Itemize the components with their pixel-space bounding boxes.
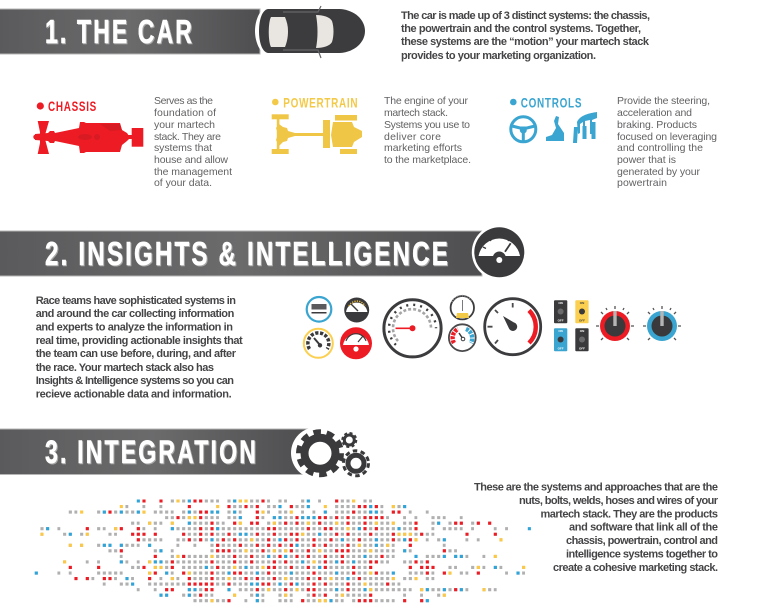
insights paragraph: the race. Your martech stack also has xyxy=(36,362,214,374)
intro paragraph: The car is made up of 3 distinct systems: the chassis, xyxy=(401,10,650,22)
insights paragraph: Race teams have sophisticated systems in xyxy=(36,295,236,307)
icon: dark toggle switch: ON xyxy=(558,301,563,305)
icon: yellow toggle switch: ON xyxy=(580,301,584,305)
icon: small yellow fuel gauge xyxy=(451,296,474,319)
banner: insights and intelligence: 2. INSIGHTS & INTELLIGENCE xyxy=(45,235,450,272)
chassis text: your martech xyxy=(154,119,215,131)
integration dot field xyxy=(35,501,531,601)
chassis text: house and allow xyxy=(154,154,228,166)
powertrain text: marketing efforts xyxy=(384,142,462,154)
icon: red dial gauge xyxy=(340,327,372,359)
icon: large speedometer xyxy=(384,300,441,357)
integration paragraph: create a cohesive marketing stack. xyxy=(553,562,718,574)
icon: second dark toggle switch xyxy=(575,328,589,351)
banner: the car: 1. THE CAR xyxy=(45,13,194,50)
integration paragraph: intelligence systems together to xyxy=(566,548,718,560)
insights paragraph xyxy=(36,295,243,400)
integration paragraph: and software that link all of the xyxy=(569,522,718,534)
powertrain text: martech stack. xyxy=(384,107,448,119)
controls label xyxy=(510,94,582,110)
icon: blue digital gauge xyxy=(307,297,331,322)
controls text: Provide the steering, xyxy=(617,95,710,107)
chassis text xyxy=(154,95,232,189)
chassis text: of your data. xyxy=(154,177,212,189)
icon: pedals xyxy=(573,112,597,143)
icon: red and blue temperature gauge xyxy=(449,324,476,351)
icon: gears xyxy=(291,427,368,479)
controls text: and controlling the xyxy=(617,142,703,154)
powertrain label: POWERTRAIN xyxy=(283,94,358,110)
chassis text: systems that xyxy=(154,142,212,154)
icon: dark toggle switch: OFF xyxy=(558,318,564,322)
icon: car from above xyxy=(255,6,365,58)
insights paragraph: and around the car collecting information xyxy=(36,308,235,320)
intro paragraph: provides to your marketing organization. xyxy=(401,50,596,62)
controls text: power that is xyxy=(617,154,676,166)
chassis label: CHASSIS xyxy=(48,98,97,114)
banner: integration xyxy=(0,429,308,474)
icon: large red zone gauge xyxy=(485,299,541,355)
icon: yellow tachometer xyxy=(304,329,333,358)
section 2: insights and intelligence xyxy=(0,225,681,400)
integration paragraph xyxy=(474,482,719,574)
icon: dark dial gauge xyxy=(344,298,369,322)
icon: blue toggle switch: OFF xyxy=(558,346,564,350)
integration paragraph: nuts, bolts, welds, hoses and wires of your xyxy=(519,495,719,507)
chassis text: Serves as the xyxy=(154,95,213,107)
icon: second dark toggle switch: OFF xyxy=(579,346,585,350)
controls text: focused on leveraging xyxy=(617,131,717,143)
section 1: the car xyxy=(0,6,717,189)
insights paragraph: Insights & Intelligence systems so you can xyxy=(36,375,234,387)
icon: second dark toggle switch: ON xyxy=(580,329,584,333)
controls label: CONTROLS xyxy=(521,94,582,110)
banner: insights and intelligence xyxy=(0,231,482,276)
controls text: braking. Products xyxy=(617,119,697,131)
insights paragraph: the team can use before, during, and after xyxy=(36,348,237,360)
controls text xyxy=(617,95,717,189)
powertrain text: deliver core xyxy=(384,131,441,143)
controls text: powertrain xyxy=(617,177,667,189)
intro paragraph: these systems are the “motion” your martech stack xyxy=(401,36,650,48)
icon: red knob xyxy=(596,306,634,341)
integration paragraph: martech stack. They are the products xyxy=(540,508,718,520)
insights paragraph: recieve actionable data and information. xyxy=(36,388,232,400)
icon: steering wheel xyxy=(511,117,536,142)
intro paragraph xyxy=(401,10,650,62)
icon: seat and foot xyxy=(546,116,564,141)
powertrain label xyxy=(272,94,358,110)
icon: yellow toggle switch: OFF xyxy=(579,318,585,322)
powertrain text: to the marketplace. xyxy=(384,154,471,166)
powertrain text: Systems you use to xyxy=(384,119,470,131)
banner: integration: 3. INTEGRATION xyxy=(45,434,258,470)
icon: blue knob xyxy=(643,306,681,341)
section 3: integration xyxy=(0,427,719,601)
icon: dark toggle switch xyxy=(554,300,567,323)
icon: blue toggle switch: ON xyxy=(558,329,563,333)
chassis text: foundation of xyxy=(154,107,216,119)
powertrain text xyxy=(384,95,471,166)
intro paragraph: the powertrain and the control systems. Together, xyxy=(401,23,641,35)
icon: race car chassis xyxy=(33,121,143,154)
insights paragraph: and experts to analyze the information in xyxy=(36,322,233,334)
icon: powertrain xyxy=(272,114,362,154)
icon: blue toggle switch xyxy=(554,328,567,351)
icon: banner gauge xyxy=(472,225,527,280)
chassis text: the management xyxy=(154,166,232,178)
integration paragraph: These are the systems and approaches that are the xyxy=(474,482,718,494)
controls text: acceleration and xyxy=(617,107,692,119)
chassis text: stack. They are xyxy=(154,131,221,143)
powertrain text: The engine of your xyxy=(384,95,468,107)
icon: yellow toggle switch xyxy=(575,300,589,323)
chassis label xyxy=(37,98,97,114)
integration paragraph: chassis, powertrain, control and xyxy=(566,535,718,547)
controls text: generated by your xyxy=(617,166,700,178)
banner: the car xyxy=(0,9,260,54)
insights paragraph: real time, providing actionable insights that xyxy=(36,335,243,347)
